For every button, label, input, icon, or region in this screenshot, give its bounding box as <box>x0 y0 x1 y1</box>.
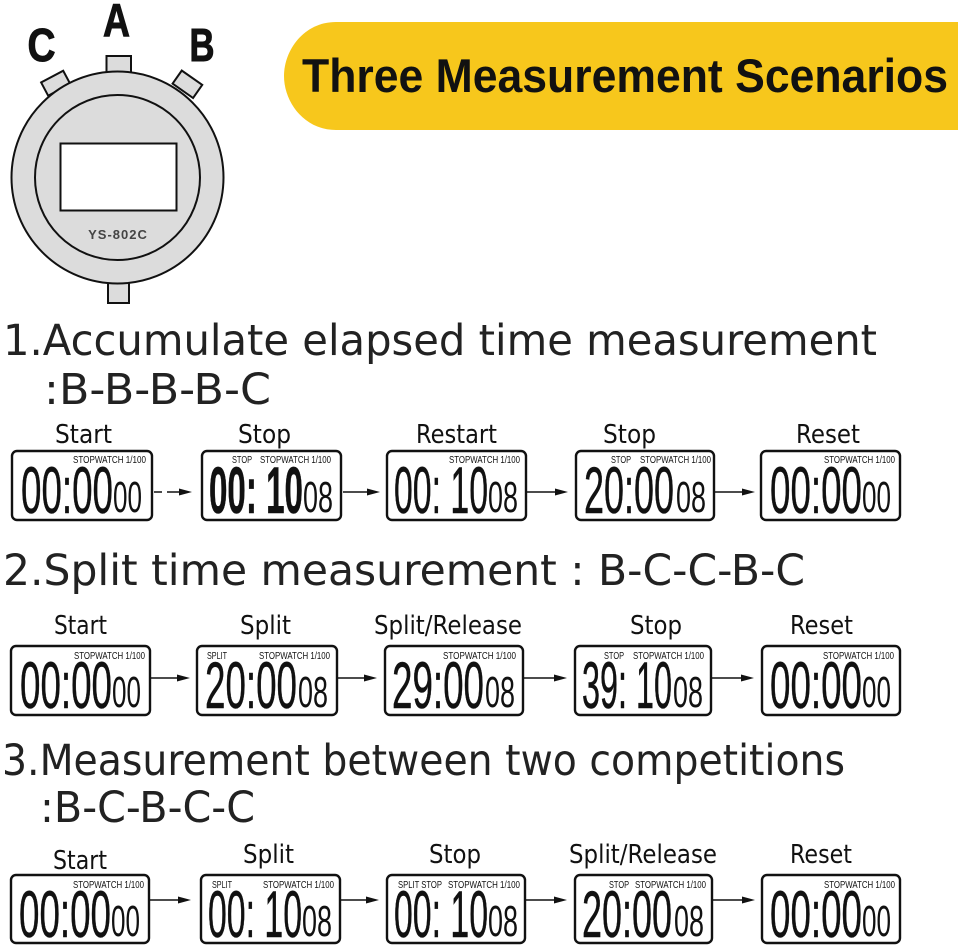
step: split/release <box>374 611 523 722</box>
arrow <box>338 677 368 679</box>
step: start: 00:00 <box>20 648 112 722</box>
step: stop: Stop <box>429 840 481 870</box>
step: stop: STOPWATCH 1/100 <box>640 455 711 466</box>
step: split/release: 08 <box>674 897 704 946</box>
step: reset: Reset <box>790 840 852 870</box>
step: stop: STOPWATCH 1/100 <box>448 880 520 891</box>
step: split: STOPWATCH 1/100 <box>259 651 330 662</box>
button A <box>106 56 131 73</box>
scenario 3 sequence <box>11 840 900 948</box>
screen <box>60 144 176 210</box>
model name: YS-802C <box>88 227 148 242</box>
step: split/release: STOPWATCH 1/100 <box>635 880 706 891</box>
arrowhead <box>741 674 754 682</box>
step: restart <box>387 420 526 527</box>
step: split: Split <box>243 840 294 870</box>
bottom button <box>108 283 129 303</box>
step: stop: Stop <box>603 420 656 450</box>
step: stop: Stop <box>630 611 682 641</box>
scenario 1 sequence <box>12 420 900 527</box>
arrowhead <box>742 896 755 904</box>
scenario 2 heading: 2.Split time measurement : B-C-C-B-C <box>3 546 805 596</box>
arrow <box>715 491 745 493</box>
step: split: SPLIT <box>212 880 232 891</box>
arrowhead <box>554 896 567 904</box>
step: reset: STOPWATCH 1/100 <box>824 455 895 466</box>
step: stop: 08 <box>676 473 706 522</box>
label C: C <box>28 19 56 71</box>
step: start: Start <box>53 846 107 876</box>
arrowhead <box>554 674 567 682</box>
step: stop <box>202 420 341 527</box>
step: reset: STOPWATCH 1/100 <box>823 651 894 662</box>
step: stop: 00: 10 <box>209 453 303 527</box>
step: start <box>12 420 152 527</box>
step: stop: 39: 10 <box>582 648 672 722</box>
step: reset <box>762 611 900 722</box>
step: stop: STOP <box>232 455 252 466</box>
step: start: STOPWATCH 1/100 <box>73 880 144 891</box>
step: start: 00 <box>113 473 142 522</box>
arrowhead <box>177 674 190 682</box>
step: stop: STOPWATCH 1/100 <box>633 651 704 662</box>
arrowhead <box>178 896 191 904</box>
button C <box>41 71 70 96</box>
arrow <box>527 491 560 493</box>
step: stop: 08 <box>303 473 333 522</box>
stopwatch diagram <box>12 0 224 303</box>
arrow <box>150 899 182 901</box>
step: split/release <box>569 840 717 948</box>
step: start <box>11 846 149 948</box>
arrowhead <box>179 488 192 496</box>
step: split/release: Split/Release <box>569 840 717 870</box>
arrow <box>341 899 370 901</box>
step: reset: 00 <box>862 897 891 946</box>
step: start: STOPWATCH 1/100 <box>74 651 145 662</box>
scenario 1 heading <box>3 316 877 415</box>
step: split/release: 29:00 <box>392 648 484 722</box>
scenario 1 heading: :B-B-B-B-C <box>44 365 271 415</box>
step: split: Split <box>240 611 291 641</box>
step: stop: 08 <box>673 668 703 717</box>
step: split/release: Split/Release <box>374 611 522 641</box>
step: start <box>11 611 150 722</box>
step: stop: STOPWATCH 1/100 <box>260 455 331 466</box>
step: start: STOPWATCH 1/100 <box>73 455 146 466</box>
scenario 2 sequence <box>11 611 900 722</box>
step: split: SPLIT <box>207 651 227 662</box>
step: start: Start <box>54 611 107 641</box>
step: stop: 20:00 <box>584 453 674 527</box>
arrowhead <box>366 896 379 904</box>
scenario 3 heading <box>2 736 845 833</box>
arrow <box>712 677 745 679</box>
step: split/release: STOP <box>609 880 629 891</box>
step: stop: SPLIT STOP <box>398 880 442 891</box>
step: split: 08 <box>302 897 332 946</box>
arrow <box>524 677 558 679</box>
arrow <box>526 899 558 901</box>
button B <box>173 71 202 98</box>
inner ring <box>35 95 200 260</box>
arrowhead <box>367 488 380 496</box>
step: stop: Stop <box>238 420 291 450</box>
step: reset: 00:00 <box>770 648 862 722</box>
step: reset: Reset <box>790 611 853 641</box>
step: split: STOPWATCH 1/100 <box>263 880 334 891</box>
step: stop: STOP <box>611 455 631 466</box>
step: stop <box>387 840 525 948</box>
step: start: 00 <box>111 897 140 946</box>
scenario 3 heading: :B-C-B-C-C <box>40 783 255 833</box>
title banner <box>284 22 958 130</box>
banner background <box>284 22 958 130</box>
step: split <box>201 840 340 948</box>
step: split/release: 08 <box>485 668 515 717</box>
arrow <box>343 491 375 493</box>
step: split <box>197 611 337 722</box>
step: split: 20:00 <box>205 648 297 722</box>
step: start: 00:00 <box>21 453 113 527</box>
step: restart: 08 <box>488 473 518 522</box>
step: stop <box>575 611 711 722</box>
step: reset: STOPWATCH 1/100 <box>824 880 895 891</box>
step: stop: 08 <box>488 897 518 946</box>
step: reset <box>761 420 900 527</box>
step: reset: 00 <box>862 473 891 522</box>
label B: B <box>190 19 214 71</box>
step: start: Start <box>55 420 112 450</box>
step: restart: 00: 10 <box>394 453 488 527</box>
step: stop <box>576 420 714 527</box>
arrowhead <box>742 488 755 496</box>
arrow <box>151 677 182 679</box>
step: split: 08 <box>298 668 328 717</box>
arrowhead <box>555 488 568 496</box>
step: stop: STOP <box>604 651 624 662</box>
arrow <box>154 491 188 493</box>
step: restart: Restart <box>416 420 497 450</box>
outer case <box>12 72 224 284</box>
step: split/release: STOPWATCH 1/100 <box>443 651 516 662</box>
step: reset: 00:00 <box>770 453 862 527</box>
scenario 1 heading: 1.Accumulate elapsed time measurement <box>3 316 877 366</box>
step: start: 00 <box>112 668 141 717</box>
scenario 3 heading: 3.Measurement between two competitions <box>2 736 845 786</box>
arrowhead <box>364 674 377 682</box>
step: restart: STOPWATCH 1/100 <box>449 455 520 466</box>
step: reset: 00 <box>862 668 891 717</box>
arrow <box>713 899 745 901</box>
step: reset: Reset <box>796 420 860 450</box>
step: reset <box>762 840 900 948</box>
